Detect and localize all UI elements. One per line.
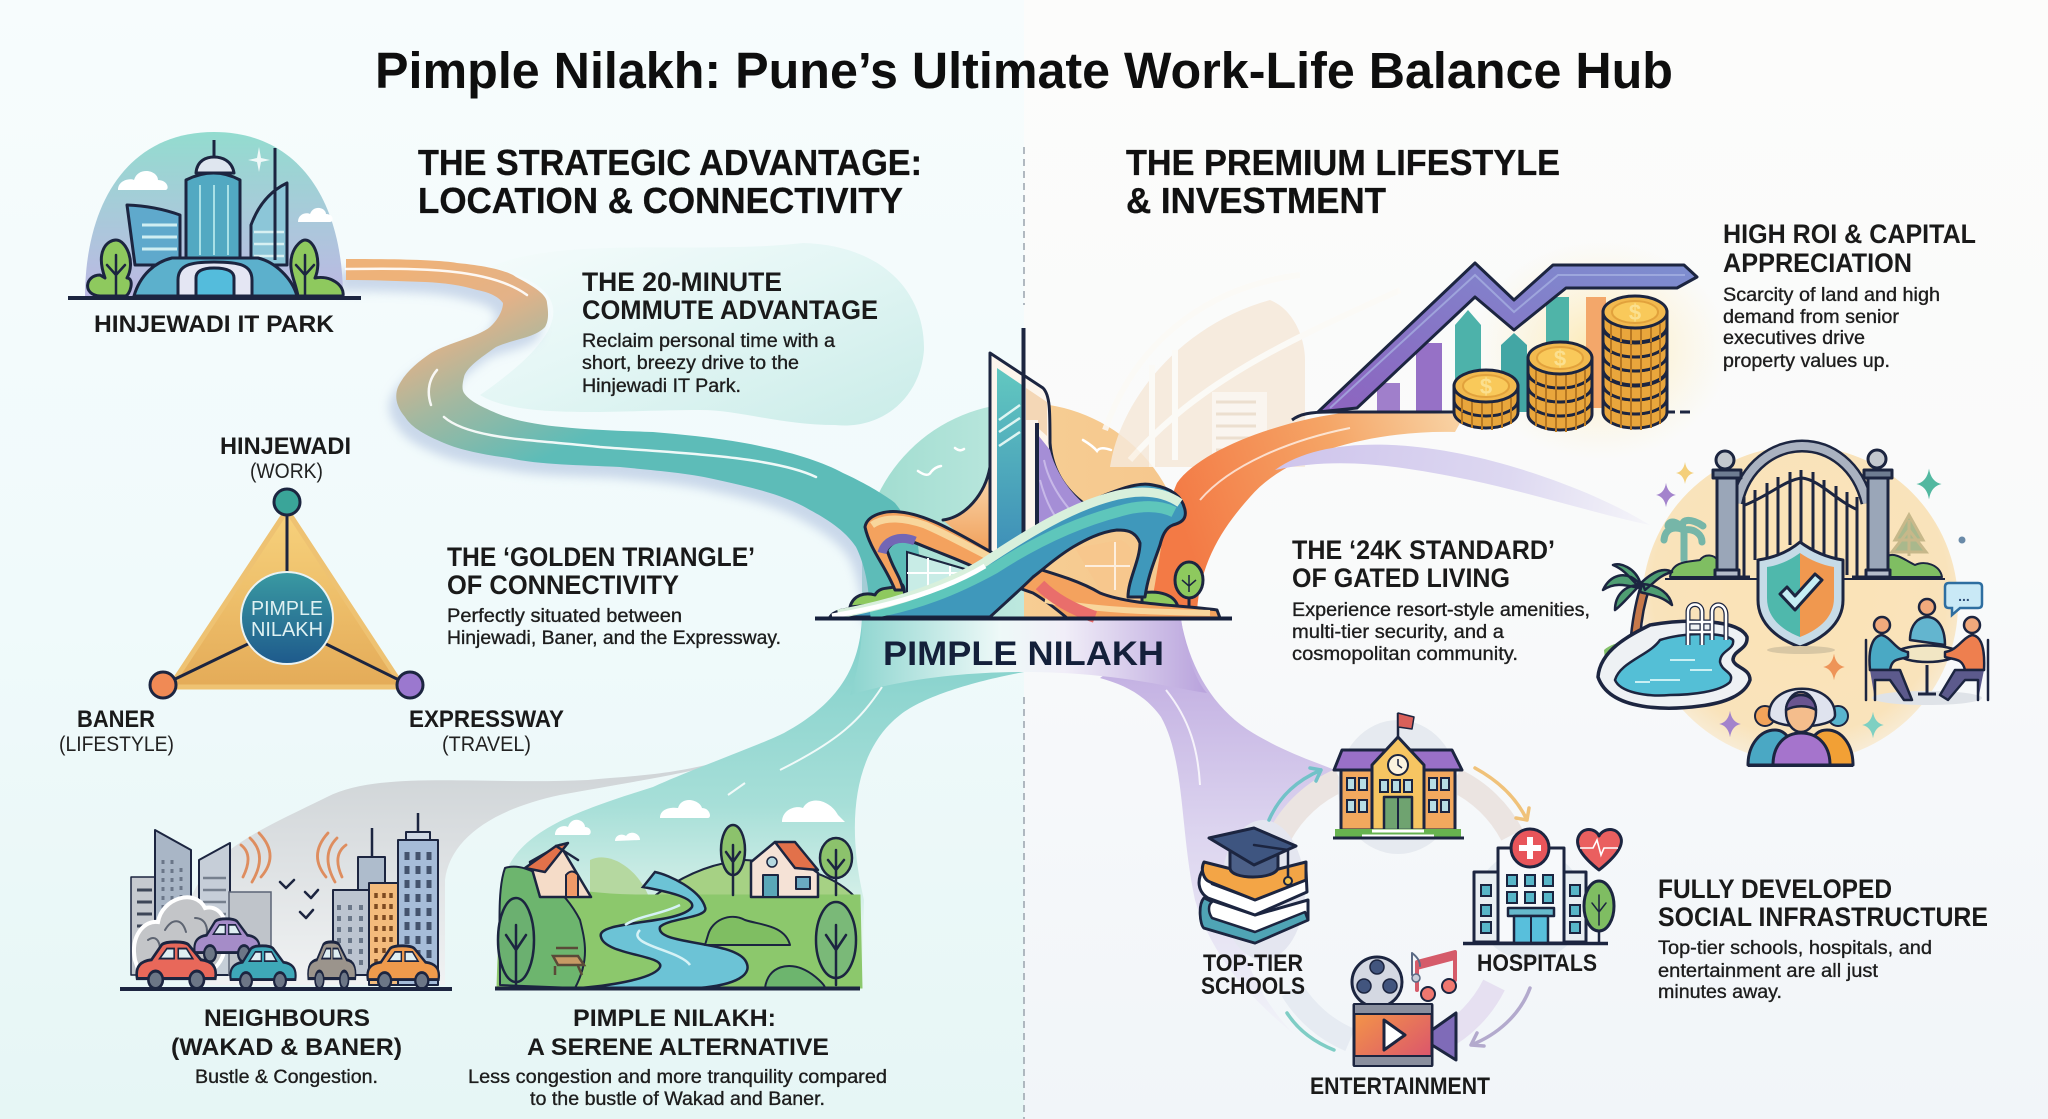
- heading: strategic advantage: [418, 142, 922, 221]
- clouds: [118, 171, 333, 222]
- top node: [274, 489, 300, 515]
- house 2: [751, 842, 818, 897]
- triangle: [170, 510, 403, 687]
- text: social infrastructure: Top-tier schools, hospitals, and: [1658, 937, 1932, 959]
- pool: [1598, 604, 1750, 708]
- ground line: [120, 987, 452, 991]
- label: serene alternative: A SERENE ALTERNATIVE: [527, 1034, 829, 1061]
- tower: [943, 328, 1086, 560]
- heading: strategic advantage: THE STRATEGIC ADVANTAGE:: [418, 142, 922, 183]
- house 1: [525, 843, 591, 897]
- text: high ROI: [1723, 219, 1976, 372]
- glass pavilion: [907, 540, 1133, 602]
- right node: [397, 672, 423, 698]
- left hill: [499, 867, 585, 988]
- label: Baner lifestyle: BANER: [77, 706, 155, 733]
- arrow line: [1318, 263, 1697, 412]
- left building: [127, 205, 180, 265]
- birds: [918, 440, 1111, 475]
- noise arcs: [241, 833, 346, 882]
- hub background circle: [862, 403, 1186, 618]
- text: social infrastructure: FULLY DEVELOPED: [1658, 874, 1892, 904]
- icon: central hub building: [815, 328, 1232, 618]
- meadow: [497, 880, 862, 988]
- icon: serene park landscape: [495, 800, 862, 988]
- far hills: [653, 860, 855, 900]
- shield: [1758, 542, 1843, 654]
- text: high ROI: APPRECIATION: [1723, 248, 1912, 278]
- teal swoosh: [830, 484, 1185, 617]
- right building: [251, 183, 287, 265]
- text: 24K standard: OF GATED LIVING: [1292, 563, 1510, 593]
- arrows: [1269, 768, 1530, 1050]
- label: serene alternative: [468, 1005, 887, 1110]
- label: Expressway travel: [409, 706, 564, 756]
- tree: [1175, 562, 1203, 608]
- label: top-tier schools: [1201, 950, 1305, 1000]
- chart: rising property values: [1292, 240, 1730, 460]
- label: Hinjewadi work: [220, 433, 351, 483]
- road: lilac swoosh to gated living: [1275, 445, 1650, 525]
- label: neighbours: (WAKAD & BANER): [171, 1034, 402, 1061]
- coin stack tall: [1603, 296, 1667, 430]
- label: serene alternative: PIMPLE NILAKH:: [573, 1005, 776, 1032]
- shrub: [705, 917, 790, 945]
- text: golden triangle: THE ‘GOLDEN TRIANGLE’: [447, 542, 755, 572]
- label: serene alternative: Less congestion and more tranquility compared: [468, 1066, 887, 1088]
- icon: entertainment film camera: [1352, 952, 1456, 1066]
- center circle: [241, 572, 333, 664]
- text: 20-minute commute advantage: THE 20-MINUTE: [582, 267, 782, 297]
- main tower: [212, 140, 216, 158]
- text: high ROI: executives drive: [1723, 327, 1865, 349]
- hub base glow: [850, 618, 1207, 695]
- left node: [150, 672, 176, 698]
- ring: [1280, 780, 1512, 1040]
- road: lower right purple: [1100, 620, 1340, 1035]
- palm tree: [1603, 564, 1672, 680]
- label: Baner lifestyle: (LIFESTYLE): [59, 733, 174, 756]
- text: golden triangle: OF CONNECTIVITY: [447, 570, 679, 600]
- diagram: social infrastructure cycle: [1199, 713, 1621, 1100]
- label: neighbours: NEIGHBOURS: [204, 1005, 370, 1032]
- title: Pimple Nilakh: Pune’s Ultimate Work-Life Balance Hub: [375, 42, 1673, 99]
- hedges: [1670, 555, 1942, 577]
- label: neighbours: [171, 1005, 402, 1088]
- community people: [1748, 689, 1853, 766]
- label: top-tier schools: TOP-TIER: [1203, 950, 1303, 977]
- background palm and pine: [1664, 520, 1703, 560]
- text: 24K standard: Experience resort-style amenities,: [1292, 599, 1590, 621]
- ground line: [495, 986, 860, 990]
- label: serene alternative: to the bustle of Wakad and Baner.: [530, 1088, 825, 1110]
- smoke: [134, 897, 226, 975]
- text: high ROI: property values up.: [1723, 350, 1890, 372]
- center label: [251, 598, 323, 641]
- trees: [88, 240, 131, 296]
- trees: [498, 825, 856, 985]
- heading: strategic advantage: LOCATION & CONNECTIVITY: [418, 180, 903, 221]
- heading: premium lifestyle: & INVESTMENT: [1126, 180, 1386, 221]
- icon background blobs: [1221, 720, 1585, 960]
- diagram: golden triangle: [150, 489, 423, 698]
- text: high ROI: Scarcity of land and high: [1723, 284, 1940, 306]
- text: high ROI: demand from senior: [1723, 306, 1900, 328]
- music notes: [1412, 952, 1456, 1001]
- text: golden triangle: Perfectly situated between: [447, 605, 682, 627]
- text: 24K standard: cosmopolitan community.: [1292, 643, 1518, 665]
- label: Hinjewadi IT Park: HINJEWADI IT PARK: [94, 311, 335, 338]
- text: social infrastructure: SOCIAL INFRASTRUCTURE: [1658, 902, 1988, 932]
- label: Hinjewadi work: HINJEWADI: [220, 433, 351, 460]
- bushes: [850, 584, 904, 607]
- coin stack medium: [1528, 342, 1592, 432]
- label: hospitals: HOSPITALS: [1477, 950, 1597, 977]
- text: 20-minute commute advantage: COMMUTE ADVANTAGE: [582, 295, 878, 325]
- faded building watermark: [1105, 275, 1400, 467]
- text: golden triangle: [447, 542, 781, 649]
- road: teal serene branch: [496, 618, 1024, 988]
- gate arch: [1737, 446, 1867, 503]
- text: high ROI: HIGH ROI & CAPITAL: [1723, 219, 1976, 249]
- background: right half: [1024, 0, 2048, 1119]
- text: 20-minute commute advantage: Hinjewadi IT Park.: [582, 375, 741, 397]
- road: Hinjewadi to hub: [339, 259, 925, 623]
- clouds: [555, 800, 845, 841]
- road: grey congestion branch: [190, 748, 761, 985]
- ground line: [815, 616, 1232, 620]
- pillars: [1713, 450, 1892, 577]
- center label: NILAKH: [251, 619, 323, 641]
- label: neighbours: Bustle & Congestion.: [195, 1066, 378, 1088]
- icon: books and graduation cap: [1199, 828, 1308, 943]
- sparkles: [1656, 462, 1966, 738]
- cars: [137, 919, 439, 989]
- pavilion: [134, 258, 297, 296]
- road: hub to investment: [1150, 412, 1465, 612]
- heading: premium lifestyle: THE PREMIUM LIFESTYLE: [1126, 142, 1560, 183]
- background bubble behind commute text: [480, 243, 924, 426]
- bars: [1377, 297, 1606, 412]
- icon: hospital: [1463, 829, 1621, 944]
- hub label: PIMPLE NILAKH: [883, 635, 1164, 673]
- text: social infrastructure: minutes away.: [1658, 981, 1782, 1003]
- river: [581, 872, 748, 988]
- label: top-tier schools: SCHOOLS: [1201, 973, 1305, 1000]
- icon: Hinjewadi IT Park: [68, 132, 361, 298]
- coin stack small: [1454, 370, 1518, 430]
- orange swoosh: [865, 512, 1220, 618]
- text: 24K standard: THE ‘24K STANDARD’: [1292, 535, 1555, 565]
- text: 20-minute commute advantage: short, breezy drive to the: [582, 352, 799, 374]
- label: entertainment: ENTERTAINMENT: [1310, 1073, 1490, 1100]
- text: 24K standard: multi-tier security, and a: [1292, 621, 1504, 643]
- people at table: ...: [1958, 588, 1970, 604]
- label: Hinjewadi work: (WORK): [250, 460, 323, 483]
- birds: [280, 880, 318, 918]
- text: 20-minute commute advantage: Reclaim personal time with a: [582, 330, 835, 352]
- icon: gated community scene: [1598, 446, 1988, 766]
- text: golden triangle: Hinjewadi, Baner, and the Expressway.: [447, 627, 781, 649]
- label: Expressway travel: EXPRESSWAY: [409, 706, 564, 733]
- ground line: [68, 296, 361, 300]
- label: Expressway travel: (TRAVEL): [442, 733, 531, 756]
- bench: [553, 948, 584, 975]
- people at table: [1866, 583, 1988, 705]
- background: left half: [0, 0, 1024, 1119]
- label: Baner lifestyle: [59, 706, 174, 756]
- text: 20-minute commute advantage: [582, 267, 878, 397]
- gate bars: [1740, 470, 1867, 577]
- center label: PIMPLE: [251, 598, 323, 620]
- text: social infrastructure: entertainment are all just: [1658, 960, 1879, 982]
- icon: congested city: [120, 813, 452, 989]
- heading: premium lifestyle: [1126, 142, 1560, 221]
- icon: school: [1333, 713, 1464, 838]
- text: social infrastructure: [1658, 874, 1988, 1003]
- text: 24K standard: [1292, 535, 1590, 665]
